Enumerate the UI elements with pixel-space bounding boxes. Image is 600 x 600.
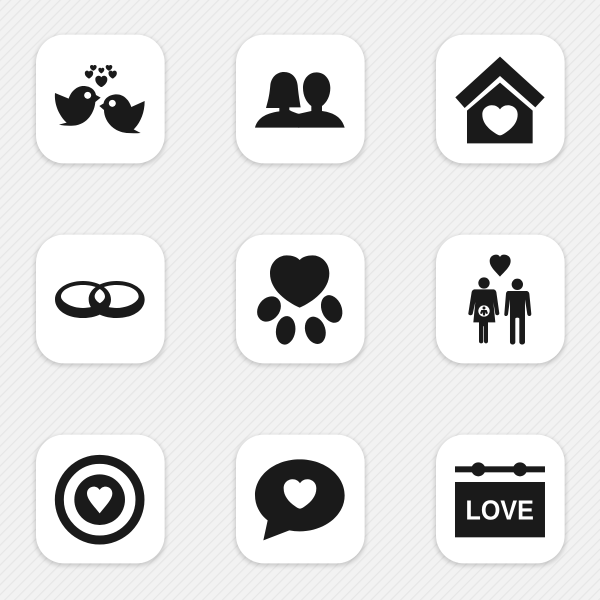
panel: love birds xyxy=(35,35,166,166)
icon: interlocked rings xyxy=(55,281,145,318)
icon: concentric circles with heart xyxy=(59,459,140,540)
panel: expecting couple xyxy=(435,235,566,366)
icon: speech bubble xyxy=(255,459,345,540)
icon: two birds with hearts xyxy=(55,65,145,133)
icon: pregnant woman, man and heart xyxy=(468,255,531,344)
icon: man and woman busts xyxy=(255,72,345,128)
panel: paw with heart xyxy=(235,235,366,366)
icon: paw print xyxy=(252,255,346,347)
panel: target with heart xyxy=(35,435,166,566)
panel: home with heart xyxy=(435,35,566,166)
panel: wedding rings xyxy=(35,235,166,366)
panel: couple silhouettes xyxy=(235,35,366,166)
panel: love sign xyxy=(435,435,566,566)
panel: speech bubble with heart xyxy=(235,435,366,566)
icon: house with heart xyxy=(455,57,545,143)
label: LOVE: LOVE xyxy=(465,494,534,525)
